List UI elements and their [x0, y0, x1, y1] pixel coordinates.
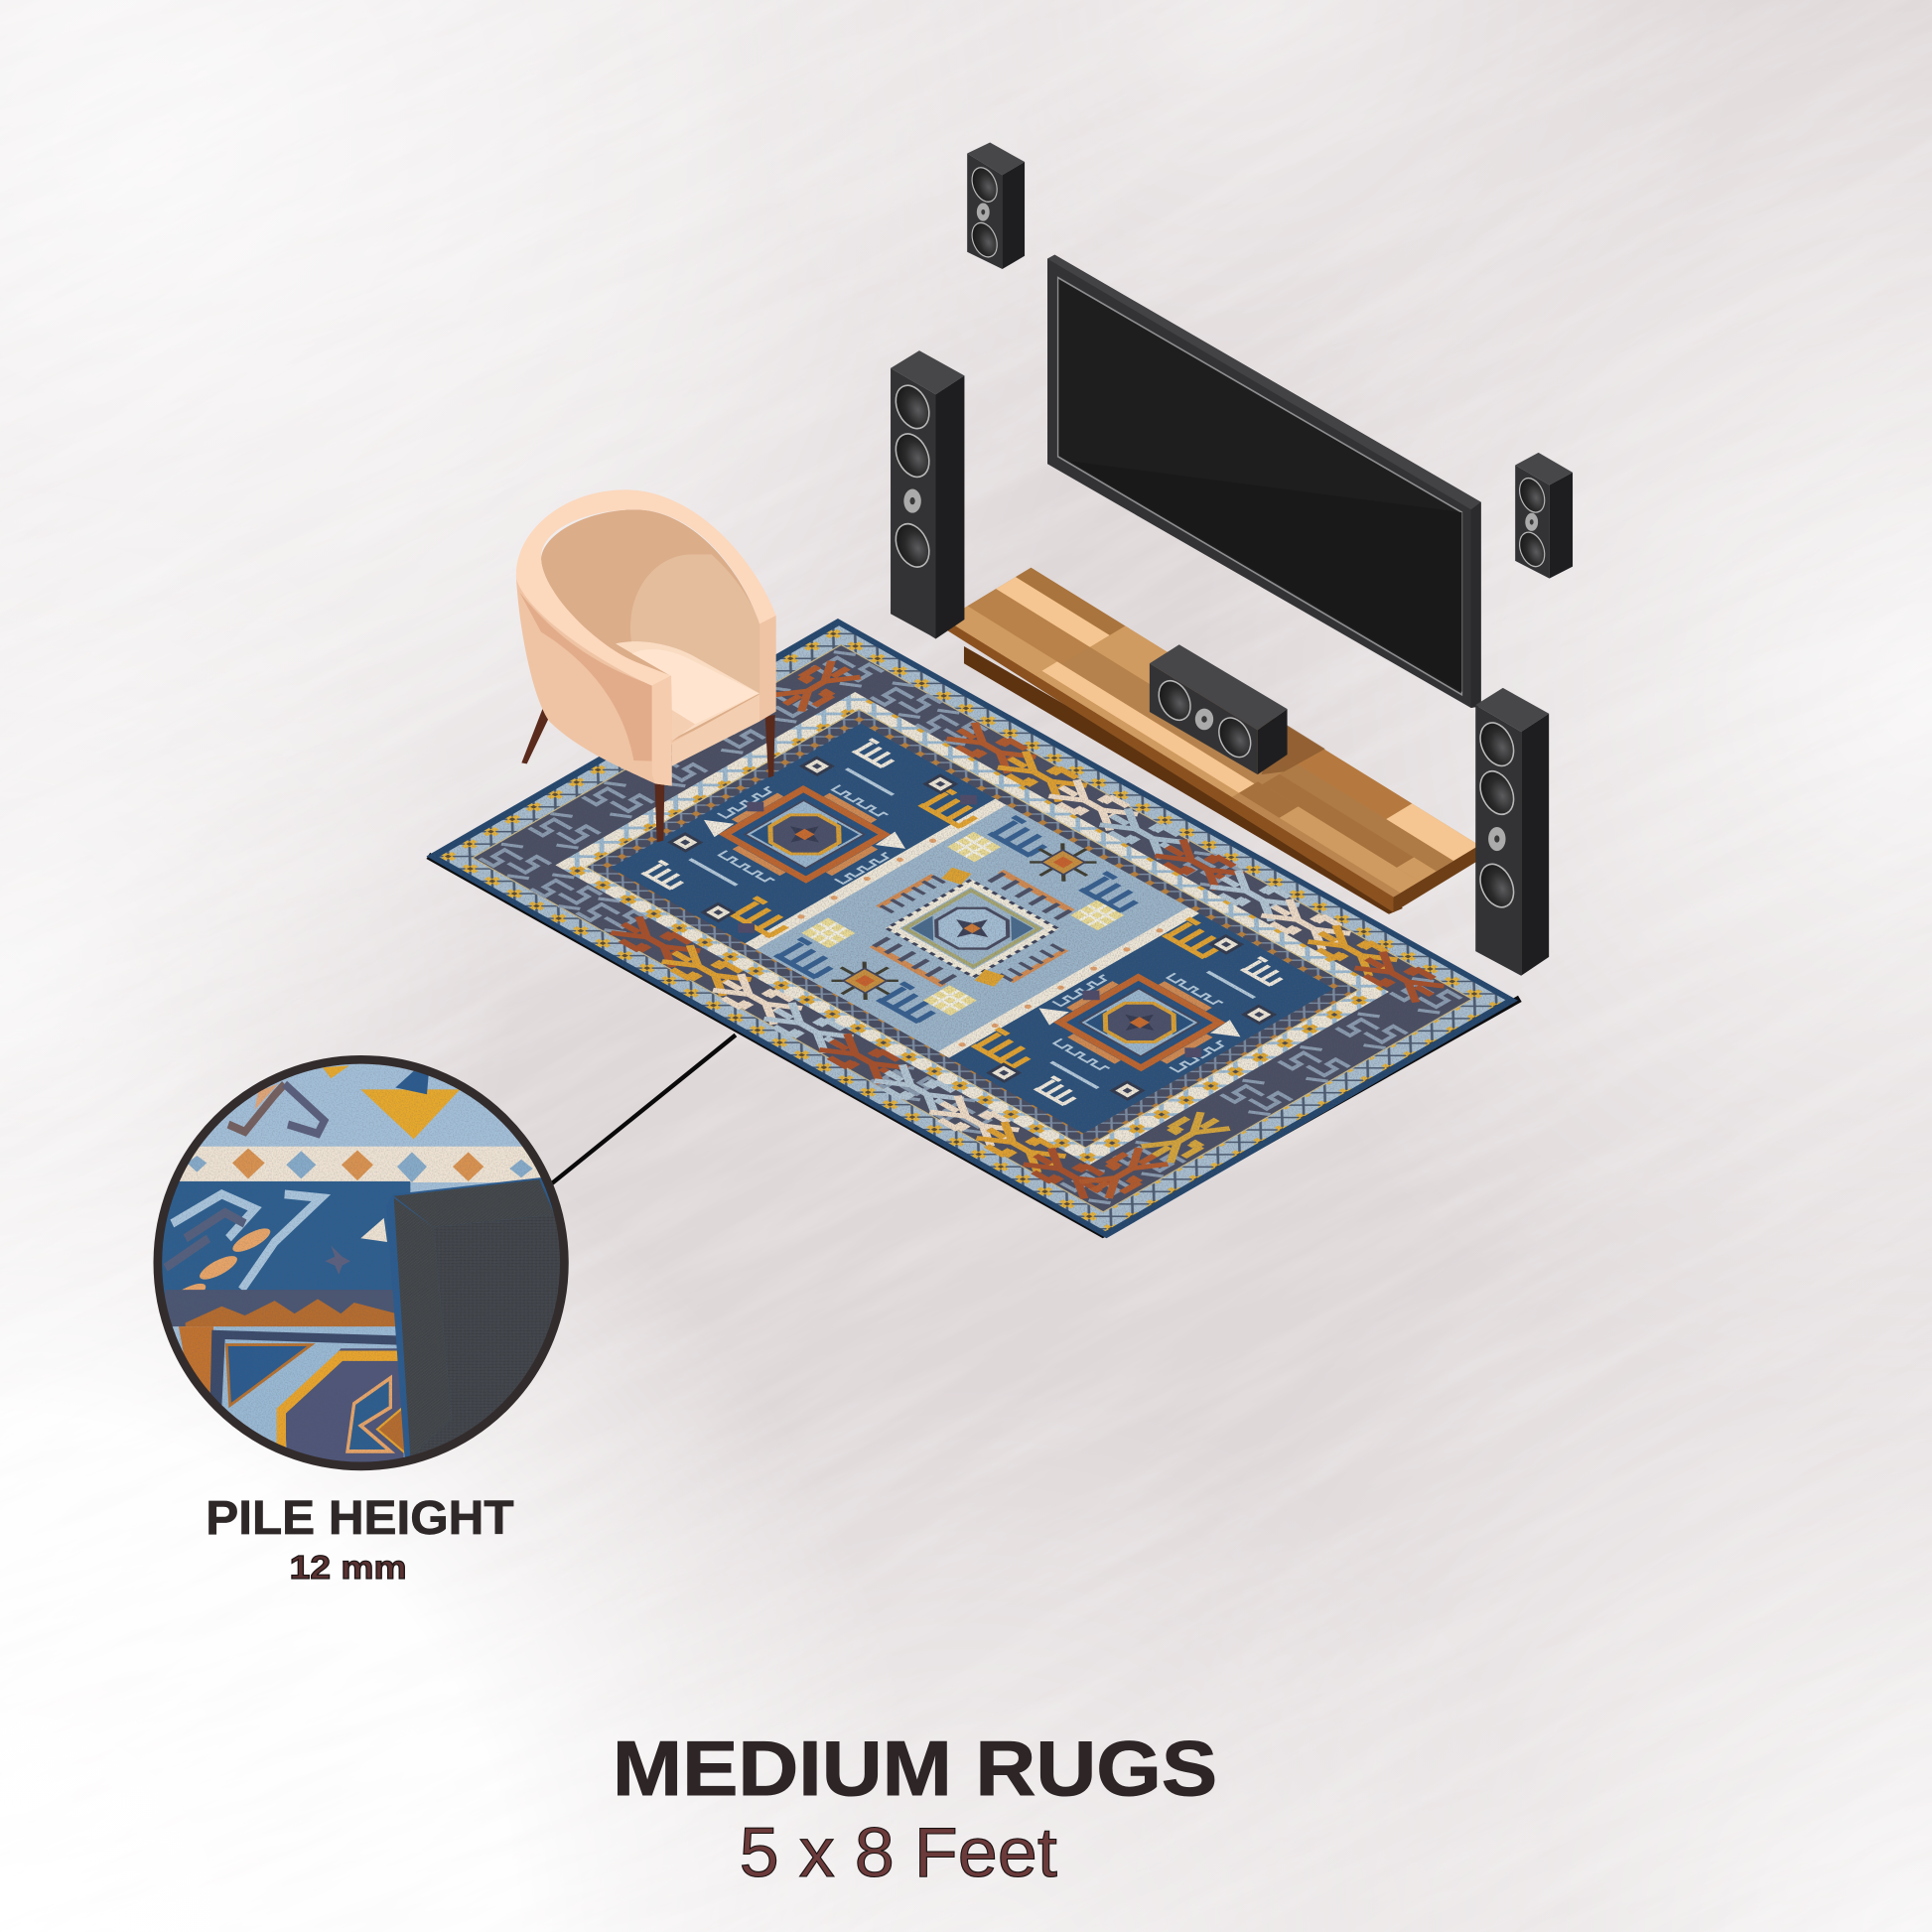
tv screen: [1058, 278, 1461, 695]
center speaker shadow: [1261, 723, 1325, 774]
chair rim: [516, 489, 776, 686]
lens ring: [158, 1059, 564, 1466]
stand front edge: [945, 620, 1394, 912]
speaker: right satellite: [1515, 453, 1573, 579]
lens wool texture: [164, 1064, 540, 1456]
center panel: [745, 799, 1199, 1058]
speaker: center channel: [1150, 644, 1288, 774]
chair legs: [521, 708, 775, 842]
tv stand: [945, 568, 1479, 914]
television: [1047, 255, 1481, 708]
speaker: top left satellite: [967, 143, 1025, 269]
connector line from rug to zoom lens: [550, 1035, 736, 1185]
armchair: [516, 489, 776, 842]
speaker: left tower: [890, 350, 964, 639]
chair interior back: [541, 509, 759, 742]
zoom lens: pile height detail: [146, 1043, 576, 1484]
pile height value: 12 mm: [290, 1550, 407, 1587]
speaker: right tower: [1473, 688, 1549, 976]
lens: blue field: [146, 1181, 410, 1299]
pile height label: PILE HEIGHT: [206, 1492, 514, 1545]
chair seat: [616, 641, 759, 740]
stand right edge: [1394, 845, 1479, 912]
field motifs: [729, 784, 1231, 1070]
chair shell shadow sweep: [519, 593, 652, 761]
chair inner backrest: [630, 554, 759, 695]
rug surface pattern: [426, 619, 1518, 1238]
chair arm front: [652, 676, 672, 786]
subtitle: size: 5 x 8 Feet: [740, 1813, 1057, 1891]
tv bezel: [1047, 255, 1481, 708]
medallions: [725, 789, 885, 880]
lens: cream diamond stripe: [179, 1146, 541, 1182]
rug edge shadow: [426, 853, 1522, 1238]
lens: lower medallion: [179, 1326, 397, 1443]
lens: yellow triangle motif: [360, 1089, 460, 1139]
lens: zigzag band: [162, 1290, 404, 1326]
lens: folded backing: [393, 1177, 554, 1457]
stand base recess: [964, 646, 1403, 914]
rug wool texture: [426, 619, 1518, 1238]
stand top planks: [945, 568, 1479, 897]
tv reflection: [1070, 461, 1461, 692]
chair outer shell: [516, 579, 776, 786]
title: MEDIUM RUGS: [613, 1725, 1217, 1812]
rug: [426, 619, 1522, 1238]
